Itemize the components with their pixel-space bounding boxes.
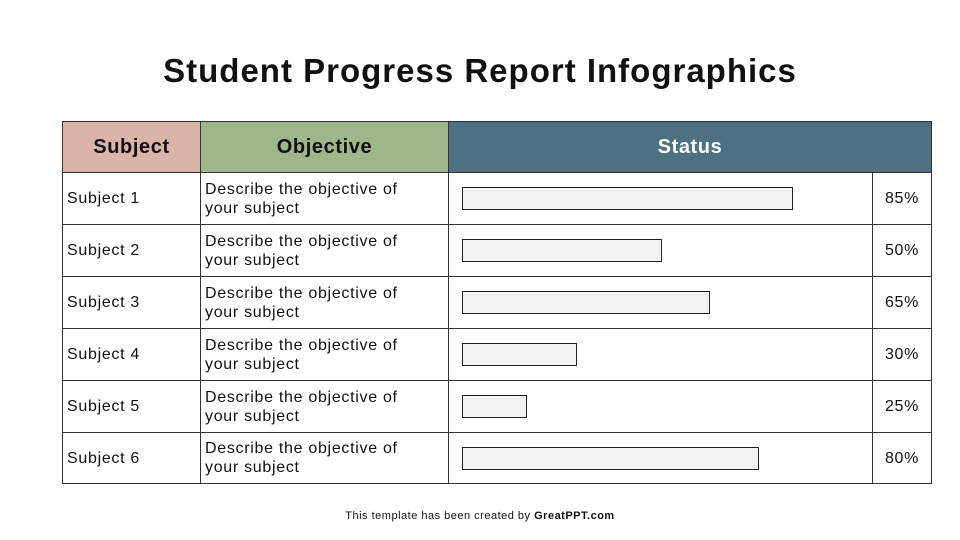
row 6: Describe the objective of	[205, 440, 398, 457]
row 3: your subject	[205, 304, 300, 320]
table	[62, 121, 932, 484]
row 1: Describe the objective of	[205, 180, 398, 198]
row 5	[62, 381, 932, 432]
footer: This template has been created by GreatPPT.com	[345, 510, 615, 522]
row 3	[62, 277, 932, 328]
row 4: Subject 4	[67, 346, 140, 363]
row 4	[62, 329, 932, 380]
title: Student Progress Report Infographics	[163, 52, 797, 89]
header: objective: Objective	[277, 136, 372, 158]
row 4: Describe the objective of	[205, 336, 398, 354]
header: status: Status	[658, 136, 722, 158]
row 1: 85%	[885, 190, 919, 207]
row 1: your subject	[205, 200, 300, 216]
row 3: Subject 3	[67, 294, 140, 311]
row 2: 50%	[885, 242, 919, 259]
header: subject	[62, 121, 201, 173]
row 3: 65%	[885, 294, 919, 311]
row 2: Subject 2	[67, 242, 140, 259]
row 5: your subject	[205, 408, 300, 424]
row 5: 25%	[885, 398, 919, 415]
row 4: 30%	[885, 346, 919, 363]
row 2: your subject	[205, 252, 300, 268]
header: objective	[200, 121, 449, 173]
row 6: your subject	[205, 459, 300, 476]
row 1: Subject 1	[67, 190, 140, 207]
row 5: Subject 5	[67, 398, 140, 415]
row 1	[62, 173, 932, 224]
row 2: Describe the objective of	[205, 232, 398, 250]
row 6: 80%	[885, 450, 919, 466]
header: subject: Subject	[93, 136, 170, 158]
row 6	[62, 433, 932, 484]
row 3: Describe the objective of	[205, 284, 398, 302]
row 5: Describe the objective of	[205, 388, 398, 406]
header: status	[448, 121, 932, 173]
row 2	[62, 225, 932, 276]
row 4: your subject	[205, 356, 300, 372]
row 6: Subject 6	[67, 450, 140, 466]
